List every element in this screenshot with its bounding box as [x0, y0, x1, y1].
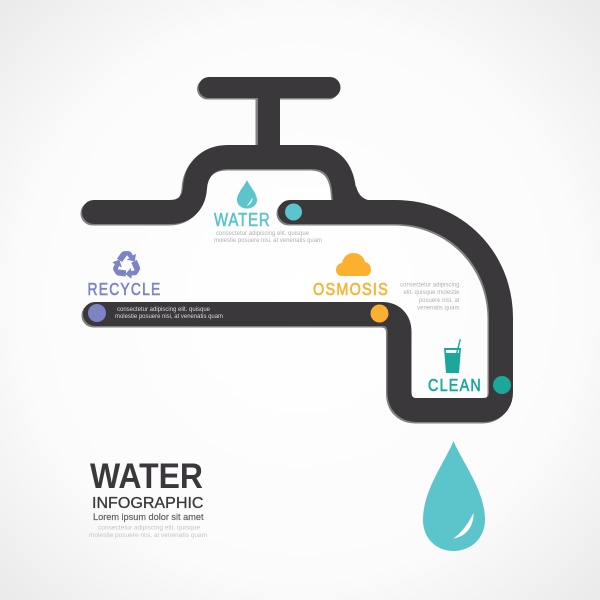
text: recycle description on pipe: molestie posuere nisi, at venenatis quam — [115, 314, 223, 320]
pipe shadow — [92, 89, 500, 412]
tagline: Lorem ipsum dolor sit amet — [93, 512, 204, 523]
text: title description: molestie posuere nisi, at venenatis quam — [89, 533, 207, 539]
faucet pipe diagram — [92, 88, 501, 412]
dot: osmosis — [370, 304, 388, 322]
label: recycle: RECYCLE — [88, 279, 162, 299]
dot: water — [285, 204, 302, 220]
spout and lower pipe — [95, 212, 501, 410]
label: water: WATER — [214, 210, 270, 230]
icon: glass of water — [444, 339, 461, 373]
text: osmosis description: posuere nisi, at — [419, 298, 460, 304]
text: osmosis description: consectetur adipiscing — [400, 282, 460, 288]
body to spout fillet — [340, 186, 370, 204]
text: water description: consectetur adipiscing elit. quisque — [216, 231, 310, 237]
faucet body — [94, 157, 346, 212]
text: water description — [214, 231, 322, 244]
text: osmosis description — [400, 282, 460, 312]
text: recycle description on pipe — [115, 307, 223, 320]
text: recycle description on pipe: consectetur adipiscing elit. quisque — [117, 307, 211, 313]
title block — [89, 457, 207, 539]
icon: water drop small — [237, 180, 257, 208]
icon: cloud — [336, 253, 371, 276]
text: osmosis description: venenatis quam — [417, 306, 460, 312]
text: title description — [89, 526, 207, 539]
dot: clean — [493, 376, 511, 394]
faucet handle — [209, 77, 330, 98]
icon: recycle — [110, 252, 143, 280]
icon: large water drop — [423, 441, 485, 551]
faucet stem — [258, 90, 280, 150]
text: osmosis description: elit. quisque molestie — [403, 290, 460, 296]
text: water description: molestie posuere nisi, at venenatis quam — [214, 238, 322, 244]
text: title description: consectetur adipiscing elit. quisque — [98, 526, 201, 532]
title: water: WATER — [90, 457, 203, 496]
label: osmosis: OSMOSIS — [313, 279, 389, 299]
subtitle: infographic: INFOGRAPHIC — [92, 495, 204, 512]
label: clean: CLEAN — [428, 375, 482, 395]
dot: recycle — [88, 304, 106, 322]
